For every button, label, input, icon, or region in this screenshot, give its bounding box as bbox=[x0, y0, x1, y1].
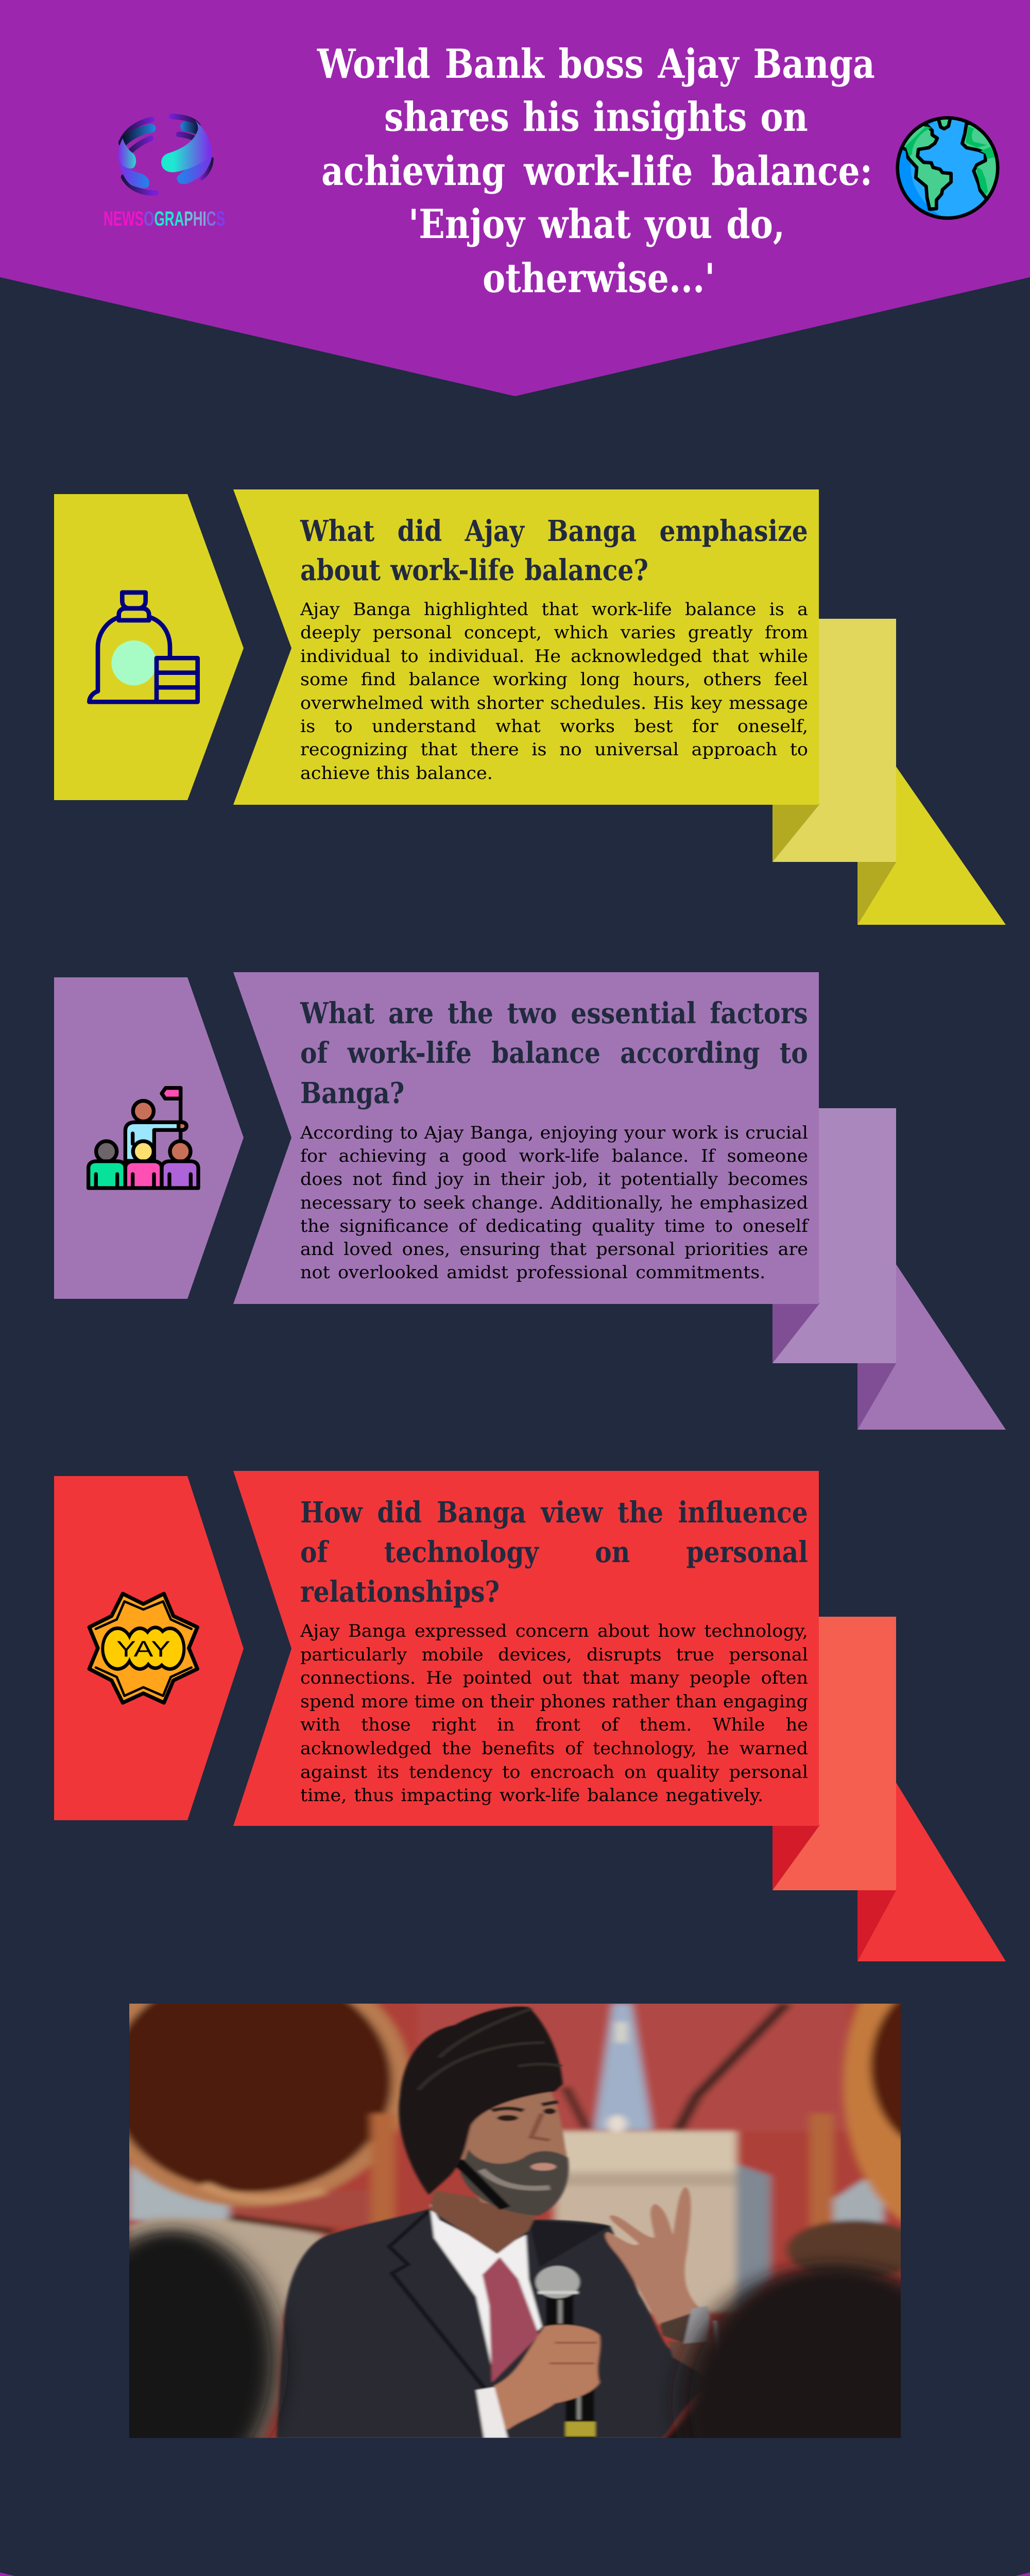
text block: against its tendency to encroach on quality personal bbox=[300, 1762, 808, 1783]
title: shares his insights on bbox=[384, 94, 808, 141]
text block: with those right in front of them. While he bbox=[300, 1715, 808, 1735]
text block: According to Ajay Banga, enjoying your work is crucial bbox=[300, 1123, 808, 1143]
title: 'Enjoy what you do, bbox=[408, 201, 785, 248]
text block: deeply personal concept, which varies greatly from bbox=[300, 622, 808, 643]
text block bbox=[300, 599, 808, 784]
text block: Ajay Banga expressed concern about how technology, bbox=[300, 1621, 808, 1641]
text block: particularly mobile devices, disrupts true personal bbox=[300, 1645, 808, 1665]
text block: not overlooked amidst professional commitments. bbox=[300, 1262, 765, 1283]
fist bbox=[492, 2325, 600, 2430]
panel: technology and relationships (red) bbox=[54, 1471, 1006, 1961]
raised hand bbox=[605, 2187, 702, 2327]
panel shapes: chevrons and ribbon fold bbox=[54, 489, 1006, 925]
panel: two essential factors (purple) bbox=[54, 972, 1006, 1430]
text block: and loved ones, ensuring that personal priorities are bbox=[300, 1239, 808, 1260]
microphone lower bbox=[565, 2388, 594, 2439]
text block: some find balance working long hours, others feel bbox=[300, 669, 808, 690]
text block: acknowledged the benefits of technology, he warned bbox=[300, 1738, 808, 1759]
suit bbox=[277, 2208, 718, 2438]
panel shapes: chevrons and ribbon fold bbox=[54, 1471, 1006, 1961]
icon: people with leader and flag bbox=[87, 1086, 200, 1190]
panel: work-life balance emphasis (yellow) bbox=[54, 489, 1006, 925]
heading bbox=[300, 1497, 808, 1607]
footer banner background bbox=[0, 2572, 1030, 2576]
header banner background bbox=[0, 0, 1030, 396]
photo: Ajay Banga speaking into a microphone bbox=[129, 2004, 901, 2438]
icon: YAY badge bbox=[52, 1561, 232, 1716]
heading: of technology on personal bbox=[300, 1535, 808, 1569]
text block bbox=[300, 1123, 810, 1283]
text block: the significance of dedicating quality time to oneself bbox=[300, 1216, 808, 1236]
text block: time, thus impacting work-life balance negatively. bbox=[300, 1785, 763, 1806]
face and beard bbox=[460, 2090, 568, 2214]
text block: overwhelmed with shorter schedules. His key message bbox=[300, 693, 808, 714]
title: World Bank boss Ajay Banga bbox=[317, 41, 875, 88]
blurred foreground heads bbox=[129, 2218, 291, 2438]
text block: necessary to seek change. Additionally, he emphasized bbox=[300, 1193, 808, 1213]
heading: What are the two essential factors bbox=[300, 996, 808, 1030]
text block: connections. He pointed out that many people often bbox=[300, 1668, 808, 1688]
text block: for achieving a good work-life balance. If someone bbox=[300, 1146, 808, 1166]
shirt and tie bbox=[430, 2204, 542, 2380]
heading: about work-life balance? bbox=[300, 553, 648, 587]
icon: money bag with coins bbox=[87, 590, 200, 704]
text block: does not find joy in their job, it potentially becomes bbox=[300, 1169, 808, 1190]
text block bbox=[300, 1621, 808, 1806]
text block: recognizing that there is no universal approach to bbox=[300, 739, 808, 760]
icon: YAY badge: YAY bbox=[116, 1637, 170, 1662]
heading: relationships? bbox=[300, 1575, 500, 1609]
wrist and watch bbox=[667, 2341, 708, 2371]
text block: individual to individual. He acknowledged that while bbox=[300, 646, 808, 667]
heading bbox=[300, 996, 808, 1110]
icon: globe bbox=[896, 116, 1000, 220]
text block: Ajay Banga highlighted that work-life balance is a bbox=[300, 599, 808, 620]
title: otherwise...' bbox=[483, 255, 715, 302]
panel shapes: chevrons and ribbon fold bbox=[54, 972, 1006, 1430]
text block: is to understand what works best for oneself, bbox=[300, 716, 808, 737]
turban bbox=[399, 2007, 563, 2195]
title bbox=[317, 41, 875, 302]
text block: spend more time on their phones rather than engaging bbox=[300, 1691, 808, 1712]
microphone upper bbox=[546, 2294, 573, 2328]
text block: achieve this balance. bbox=[300, 763, 493, 784]
heading bbox=[300, 514, 808, 587]
heading: How did Banga view the influence bbox=[300, 1496, 808, 1530]
heading: of work-life balance according to bbox=[300, 1036, 808, 1070]
heading: Banga? bbox=[300, 1076, 404, 1110]
title: achieving work-life balance: bbox=[321, 148, 872, 195]
header logo: Newsographics bbox=[104, 113, 225, 226]
heading: What did Ajay Banga emphasize bbox=[300, 514, 808, 548]
